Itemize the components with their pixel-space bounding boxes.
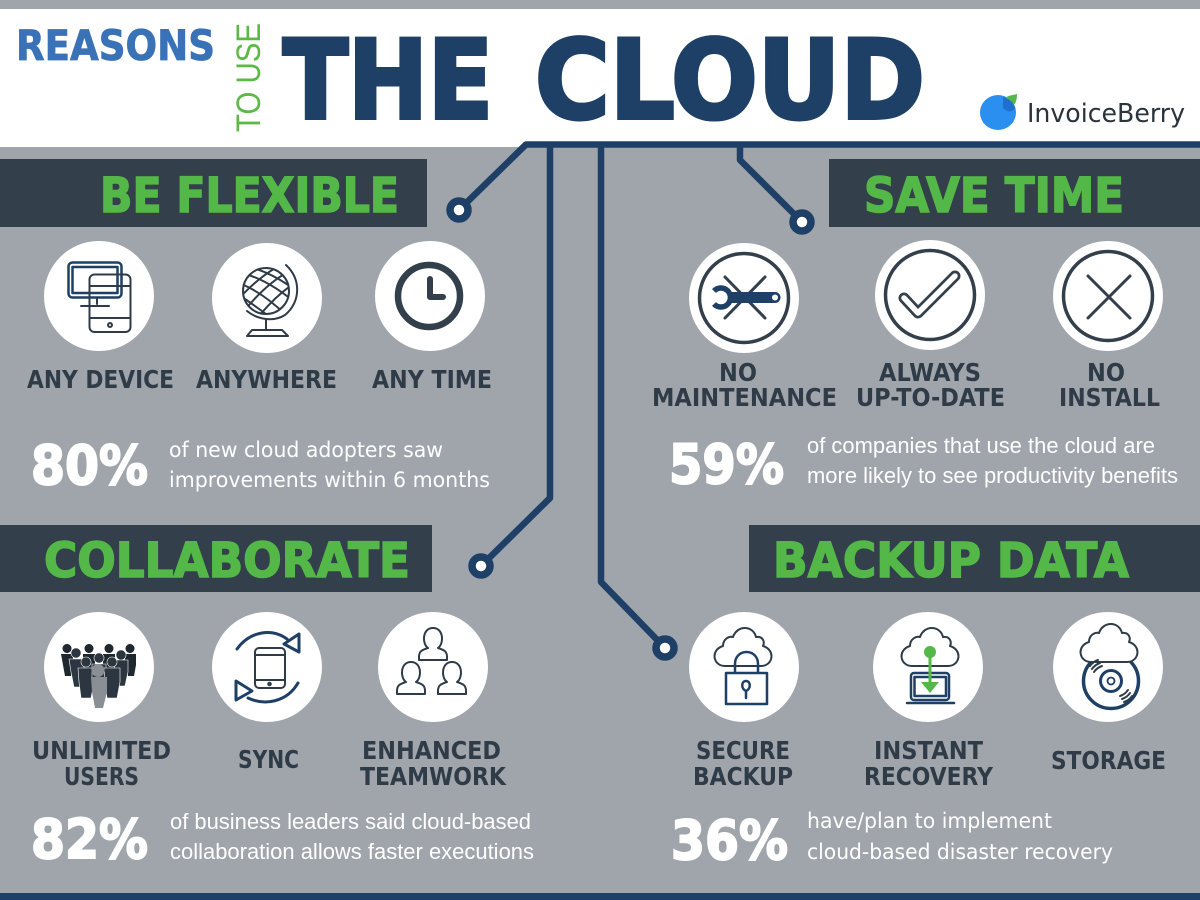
icon: globe bbox=[212, 243, 322, 353]
stat text bbox=[807, 433, 1178, 488]
panel: backup data bbox=[671, 525, 1200, 872]
logo: invoiceberry bbox=[980, 94, 1185, 130]
icon: always up-to-date bbox=[875, 240, 985, 350]
logo: invoiceberry: InvoiceBerry bbox=[1027, 99, 1185, 129]
label: enhanced teamwork: ENHANCED bbox=[362, 736, 501, 765]
stat text bbox=[170, 809, 534, 864]
label: enhanced teamwork bbox=[360, 736, 507, 791]
title: the cloud: THE bbox=[283, 17, 493, 144]
label: no maintenance bbox=[652, 358, 837, 412]
heading: backup data bbox=[749, 525, 1200, 592]
title: the cloud: CLOUD bbox=[535, 17, 925, 144]
icon: secure backup bbox=[689, 612, 799, 722]
stat text bbox=[169, 438, 490, 492]
stat: 36%: 36% bbox=[671, 809, 788, 872]
label: no maintenance: NO bbox=[719, 358, 757, 387]
heading: save time: SAVE TIME bbox=[864, 168, 1124, 224]
label: enhanced teamwork: TEAMWORK bbox=[360, 762, 507, 791]
stat text bbox=[807, 809, 1113, 864]
label: secure backup bbox=[693, 736, 793, 791]
stat: 82%: 82% bbox=[31, 808, 148, 871]
heading: be flexible: BE FLEXIBLE bbox=[100, 168, 399, 224]
stat text: of new cloud adopters saw bbox=[169, 438, 443, 462]
title: the cloud bbox=[283, 17, 925, 144]
stat text: collaboration allows faster executions bbox=[170, 839, 534, 864]
circuit lines bbox=[459, 144, 1200, 648]
panel: collaborate bbox=[0, 525, 534, 871]
label: no install bbox=[1059, 358, 1160, 412]
connector dots bbox=[450, 201, 811, 657]
stat text: of business leaders said cloud-based bbox=[170, 809, 531, 834]
icon: any device bbox=[44, 241, 154, 351]
label: secure backup: SECURE bbox=[696, 736, 790, 765]
stat text: have/plan to implement bbox=[807, 809, 1052, 833]
title: to use: TO USE bbox=[230, 23, 268, 132]
stat text: of companies that use the cloud are bbox=[807, 433, 1155, 458]
label: secure backup: BACKUP bbox=[693, 762, 793, 791]
label: storage: STORAGE bbox=[1051, 746, 1166, 775]
heading: collaborate: COLLABORATE bbox=[44, 533, 410, 589]
icon: no install bbox=[1053, 241, 1163, 351]
stat text: improvements within 6 months bbox=[169, 468, 490, 492]
label: no install: NO bbox=[1087, 358, 1125, 387]
label: anywhere: ANYWHERE bbox=[196, 365, 337, 394]
title: reasons: REASONS bbox=[16, 21, 215, 70]
bottom band bbox=[0, 893, 1200, 900]
label: instant recovery bbox=[864, 736, 993, 791]
heading: be flexible bbox=[0, 159, 427, 227]
stat text: cloud-based disaster recovery bbox=[807, 840, 1113, 864]
label: always up-to-date bbox=[856, 358, 1005, 412]
panel: be flexible bbox=[0, 159, 492, 497]
label: instant recovery: RECOVERY bbox=[864, 762, 993, 791]
stat text: more likely to see productivity benefits bbox=[807, 463, 1178, 488]
heading: backup data: BACKUP DATA bbox=[773, 533, 1129, 589]
icon: no maintenance bbox=[689, 243, 799, 353]
label: sync: SYNC bbox=[238, 745, 299, 774]
icon: clock bbox=[375, 241, 485, 351]
icon: instant recovery bbox=[873, 612, 983, 722]
heading: save time bbox=[829, 159, 1200, 227]
label: always up-to-date: ALWAYS bbox=[879, 358, 981, 387]
label: unlimited users: USERS bbox=[64, 762, 139, 791]
label: any device: ANY DEVICE bbox=[27, 365, 174, 394]
stat: 59%: 59% bbox=[669, 433, 784, 496]
icon: sync bbox=[212, 612, 322, 722]
label: no maintenance: MAINTENANCE bbox=[652, 383, 837, 412]
label: any time: ANY TIME bbox=[372, 365, 492, 394]
label: unlimited users bbox=[32, 736, 171, 791]
label: no install: INSTALL bbox=[1059, 383, 1160, 412]
stat: 80%: 80% bbox=[31, 434, 148, 497]
icon: enhanced teamwork bbox=[378, 612, 488, 722]
label: unlimited users: UNLIMITED bbox=[32, 736, 171, 765]
label: instant recovery: INSTANT bbox=[874, 736, 983, 765]
panel: save time bbox=[652, 159, 1200, 496]
icon: unlimited users bbox=[44, 612, 154, 722]
icon: storage bbox=[1053, 612, 1163, 722]
label: always up-to-date: UP-TO-DATE bbox=[856, 383, 1005, 412]
header band bbox=[0, 9, 1200, 147]
